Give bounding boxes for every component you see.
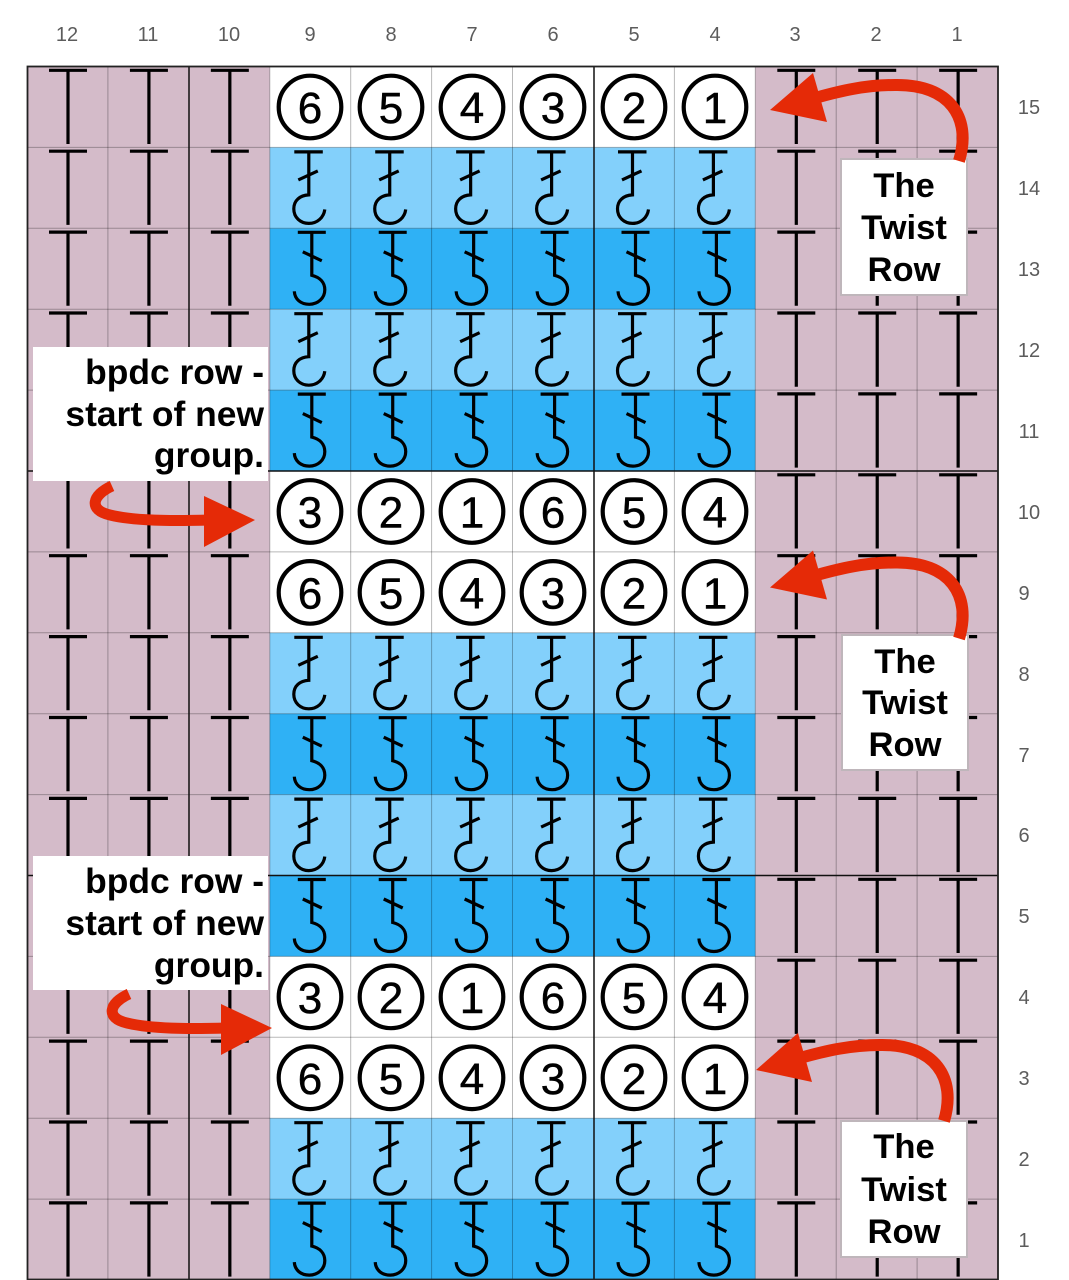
row number labels: 6	[1018, 825, 1030, 847]
hook stitches: blue rows	[294, 152, 730, 1275]
row number labels: 1	[1018, 1230, 1030, 1252]
row number labels: 15	[1018, 97, 1040, 119]
circled numbers: row 4: 2	[379, 974, 403, 1023]
circled numbers: row 4: 4	[703, 974, 727, 1023]
row number labels: 13	[1018, 259, 1040, 281]
arrow: twist row 9	[770, 550, 963, 638]
callout: The Twist Row, rows 2-1: Twist	[861, 1171, 947, 1209]
callout: The Twist Row, rows 14-13: The	[873, 167, 935, 205]
arrow: twist row 3	[756, 1033, 948, 1121]
callout: bpdc row, upper: start of new	[65, 394, 264, 434]
column number labels: 4	[709, 24, 721, 46]
callout: The Twist Row, rows 8-7: Twist	[862, 684, 948, 722]
column number labels: 7	[466, 24, 478, 46]
callout: bpdc row, lower: bpdc row -	[85, 861, 264, 901]
circled numbers: row 9: 3	[541, 569, 565, 618]
post stitches: right columns	[777, 70, 977, 1277]
callout: The Twist Row, rows 14-13: Twist	[861, 209, 947, 247]
arrow: twist row 15	[770, 73, 963, 161]
circled numbers: row 15	[279, 76, 746, 138]
centre band: blue rows	[270, 147, 755, 1280]
circled numbers: row 9: 4	[460, 569, 484, 618]
circled numbers: row 3: 6	[298, 1055, 322, 1104]
row number labels: 9	[1018, 583, 1030, 605]
circled numbers: row 10	[279, 480, 746, 543]
circled numbers: row 4: 5	[622, 974, 646, 1023]
column number labels: 2	[870, 24, 882, 46]
circled numbers: row 3	[279, 1046, 746, 1109]
callout: The Twist Row, rows 2-1: Row	[868, 1213, 941, 1251]
callout: The Twist Row, rows 14-13	[841, 159, 967, 295]
callout: The Twist Row, rows 8-7: The	[874, 643, 936, 681]
circled numbers: row 10: 1	[460, 488, 484, 538]
column number labels: 6	[547, 24, 559, 46]
arrow: bpdc row 4	[112, 994, 272, 1055]
column number labels: 10	[218, 24, 240, 46]
circled numbers: row 10: 5	[622, 488, 646, 538]
circled numbers: row 3: 1	[703, 1055, 727, 1104]
callout: The Twist Row, rows 2-1	[841, 1121, 967, 1257]
callout: bpdc row, lower: start of new	[65, 903, 264, 943]
row number labels: 10	[1018, 502, 1040, 524]
circled numbers: row 15: 3	[541, 84, 565, 133]
circled numbers: row 3: 5	[379, 1055, 403, 1104]
row number labels: 2	[1018, 1149, 1030, 1171]
callout: bpdc row, upper: group.	[154, 435, 264, 475]
callout: The Twist Row, rows 8-7	[842, 635, 968, 770]
column number labels: 1	[951, 24, 963, 46]
circled numbers: row 10: 3	[298, 488, 322, 538]
column number labels: 12	[56, 24, 78, 46]
column number labels	[56, 24, 963, 46]
row number labels: 7	[1018, 745, 1030, 767]
callout: The Twist Row, rows 8-7: Row	[868, 726, 942, 764]
arrow: bpdc row 10	[95, 486, 255, 547]
circled numbers: row 10: 6	[541, 488, 565, 538]
circled numbers: row 9: 2	[622, 569, 646, 618]
circled numbers: row 9: 5	[379, 569, 403, 618]
post stitches: left columns	[49, 70, 249, 1277]
circled numbers: row 4: 1	[460, 974, 484, 1023]
callout: bpdc row, upper: bpdc row -	[85, 352, 264, 392]
circled numbers: row 3: 3	[541, 1055, 565, 1104]
circled numbers: row 9: 1	[703, 569, 727, 618]
circled numbers: row 3: 2	[622, 1055, 646, 1104]
column number labels: 11	[138, 24, 158, 46]
row number labels: 8	[1018, 664, 1030, 686]
row number labels: 12	[1018, 340, 1040, 362]
row number labels: 4	[1018, 987, 1030, 1009]
row number labels: 11	[1019, 421, 1039, 443]
circled numbers: row 10: 4	[703, 488, 727, 538]
column number labels: 8	[385, 24, 397, 46]
row number labels: 5	[1018, 906, 1030, 928]
callout: bpdc row, upper	[33, 347, 268, 481]
callout: The Twist Row, rows 14-13: Row	[868, 251, 941, 289]
callout: The Twist Row, rows 2-1: The	[873, 1128, 935, 1166]
circled numbers: row 15: 4	[460, 84, 484, 133]
callout: bpdc row, lower	[33, 856, 268, 990]
row number labels: 3	[1018, 1068, 1030, 1090]
row number labels: 14	[1018, 178, 1040, 200]
row number labels	[1018, 97, 1040, 1252]
circled numbers: row 15: 6	[298, 84, 322, 133]
circled numbers: row 15: 5	[379, 84, 403, 133]
column number labels: 5	[628, 24, 640, 46]
circled numbers: row 15: 1	[703, 84, 727, 133]
circled numbers: row 9	[279, 561, 746, 624]
circled numbers: row 4	[279, 966, 746, 1028]
circled numbers: row 10: 2	[379, 488, 403, 538]
callout: bpdc row, lower: group.	[154, 945, 264, 985]
column number labels: 9	[304, 24, 316, 46]
column number labels: 3	[789, 24, 801, 46]
circled numbers: row 9: 6	[298, 569, 322, 618]
circled numbers: row 4: 6	[541, 974, 565, 1023]
circled numbers: row 3: 4	[460, 1055, 484, 1104]
circled numbers: row 4: 3	[298, 974, 322, 1023]
circled numbers: row 15: 2	[622, 84, 646, 133]
